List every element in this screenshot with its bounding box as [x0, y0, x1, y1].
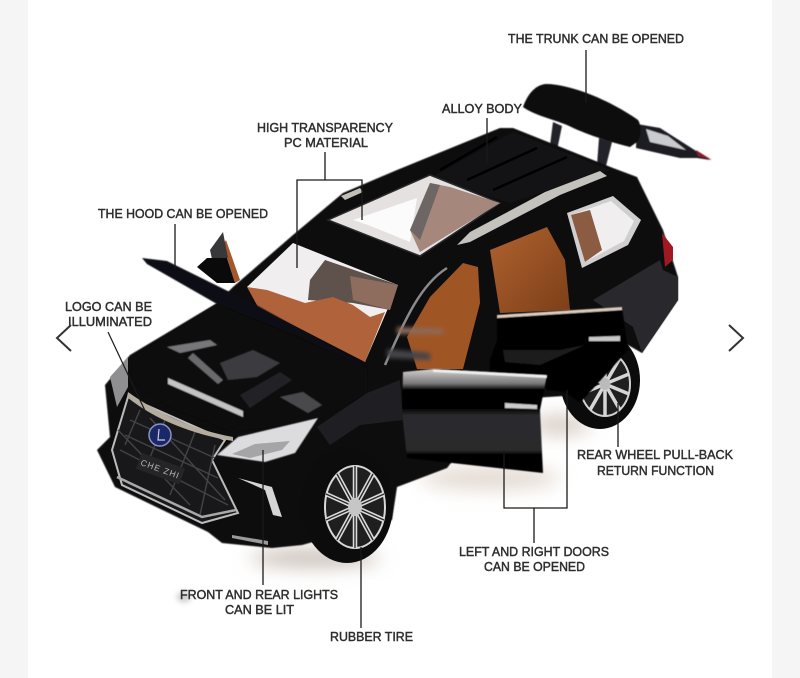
interior blur marks — [387, 327, 443, 360]
front fender reflection — [317, 380, 403, 445]
callout: alloy body: ALLOY BODY — [442, 102, 523, 116]
callout: PC material: PC MATERIAL — [284, 136, 368, 150]
callout: tire — [330, 547, 413, 644]
car body silhouette — [97, 128, 678, 548]
callout: PC material — [257, 121, 394, 268]
A-pillar chrome line — [385, 268, 447, 365]
front wheel — [301, 447, 393, 563]
roof panels — [430, 132, 610, 203]
callout: doors: CAN BE OPENED — [484, 560, 585, 574]
lower intake chrome — [232, 535, 268, 545]
rear wheel — [560, 331, 640, 429]
arrow: next — [729, 325, 743, 351]
rear door open — [490, 307, 628, 403]
callout: lights: CAN BE LIT — [225, 603, 294, 617]
callout: logo: ILLUMINATED — [68, 315, 152, 329]
side mirror and open left door — [197, 232, 240, 283]
callout: rear wheel: RETURN FUNCTION — [597, 464, 714, 478]
callout: hood: THE HOOD CAN BE OPENED — [98, 207, 268, 221]
number plate — [136, 453, 185, 484]
hood raised — [142, 258, 367, 372]
tailgate — [523, 84, 712, 166]
rear seats — [490, 227, 570, 313]
callout: lights — [180, 450, 338, 617]
tail light — [662, 233, 673, 267]
callout: tire: RUBBER TIRE — [330, 630, 413, 644]
right headlight — [217, 418, 318, 462]
rear side window — [567, 196, 641, 268]
callout: trunk: THE TRUNK CAN BE OPENED — [508, 32, 684, 46]
callout: doors: LEFT AND RIGHT DOORS — [459, 545, 609, 559]
arrow: previous — [57, 325, 71, 351]
front seats interior — [407, 263, 480, 369]
chrome hood strip — [127, 392, 233, 441]
callout: doors — [459, 390, 609, 574]
callout: logo: LOGO CAN BE — [65, 300, 152, 314]
left headlight — [110, 357, 128, 407]
smudge near lights label — [177, 592, 191, 602]
grille — [112, 397, 238, 523]
callout: lights: FRONT AND REAR LIGHTS — [180, 588, 338, 602]
callout: PC material: HIGH TRANSPARENCY — [257, 121, 394, 135]
number plate: CHE ZHI — [139, 457, 181, 481]
roof rail — [457, 171, 607, 245]
rear body sheen — [593, 260, 678, 353]
sunroof — [328, 175, 500, 256]
callout: rear wheel — [577, 403, 734, 478]
DRL chrome trim — [238, 478, 282, 517]
logo badge — [149, 424, 171, 446]
callout: alloy body — [442, 102, 523, 163]
ground shadow — [250, 415, 590, 567]
windshield — [247, 243, 398, 362]
front roof rail tip — [341, 188, 363, 200]
engine bay — [133, 304, 367, 432]
callout: logo — [65, 300, 152, 415]
front door open — [402, 369, 547, 473]
car illustration — [97, 84, 712, 563]
callout: rear wheel: REAR WHEEL PULL-BACK — [577, 448, 734, 462]
